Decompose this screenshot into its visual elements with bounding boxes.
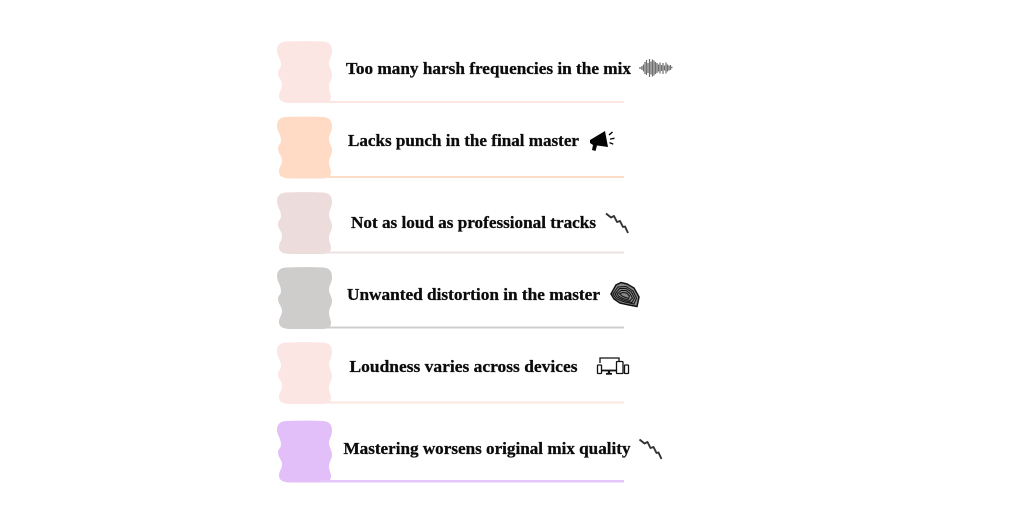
row 1: harsh frequencies — [277, 41, 672, 103]
label 6: Mastering worsens original mix quality — [344, 439, 631, 458]
icon: distortion rings — [611, 282, 639, 306]
row 3: not as loud — [277, 192, 628, 254]
underline 3 — [320, 252, 624, 254]
icon: falling line — [606, 214, 628, 233]
icon: falling line — [640, 440, 662, 459]
underline 6 — [320, 480, 624, 482]
blob 2 — [277, 117, 332, 178]
blob 6 — [277, 421, 332, 482]
row 2: lacks punch — [277, 117, 624, 178]
blob 4 — [277, 267, 332, 329]
row 4: distortion — [277, 267, 639, 329]
blob 5 — [277, 342, 332, 404]
icon: waveform — [639, 59, 672, 77]
underline 1 — [320, 101, 624, 103]
row 5: loudness varies — [277, 342, 628, 404]
underline 5 — [320, 402, 624, 404]
underline 2 — [320, 176, 624, 178]
label 4: Unwanted distortion in the master — [347, 285, 600, 304]
label 2: Lacks punch in the final master — [348, 131, 579, 150]
label 5: Loudness varies across devices — [350, 357, 578, 376]
row 6: worsens quality — [277, 421, 662, 482]
blob 3 — [277, 192, 332, 254]
blob 1 — [277, 41, 332, 103]
label 3: Not as loud as professional tracks — [351, 213, 596, 232]
underline 4 — [320, 326, 624, 328]
icon: devices — [598, 358, 628, 374]
icon: megaphone — [590, 131, 614, 151]
label 1: Too many harsh frequencies in the mix — [346, 59, 631, 78]
